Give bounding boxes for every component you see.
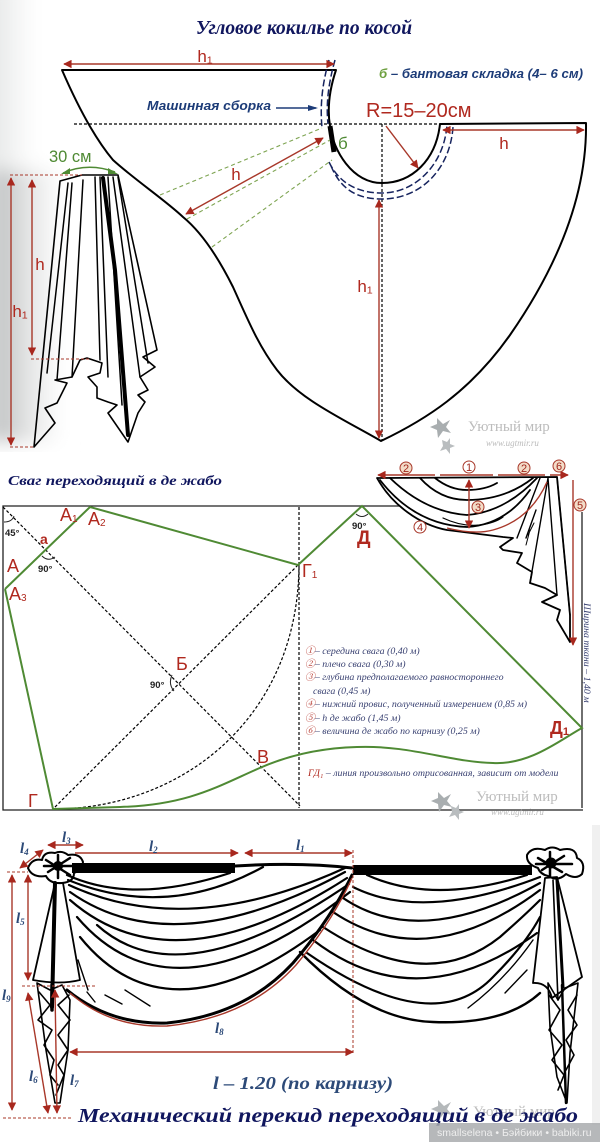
watermark: bottom <box>431 1100 555 1120</box>
label: machine gathering: Машинная сборка <box>147 99 271 113</box>
watermark: top: Уютный мир <box>468 419 550 435</box>
point labels: 2 <box>100 518 106 529</box>
radius arrow <box>386 126 418 168</box>
point labels: А <box>60 505 72 525</box>
left rosette <box>28 852 83 883</box>
circled numbers <box>400 460 586 534</box>
length labels: l <box>215 1021 219 1037</box>
circled numbers: 6 <box>556 461 562 473</box>
watermark: middle: www.ugtmir.ru <box>491 807 544 817</box>
length labels: l <box>16 911 20 927</box>
red height arrows <box>10 175 90 447</box>
point labels: Д <box>550 718 563 738</box>
label: 30 cm: 30 см <box>49 148 92 166</box>
watermark: top: www.ugtmir.ru <box>486 438 539 448</box>
seam allowance dashes <box>321 60 453 199</box>
left swag folds <box>67 867 350 989</box>
label: h: h <box>35 255 45 274</box>
length labels: 4 <box>23 847 29 857</box>
legend notes: ②– плечо свага (0,30 м) <box>305 658 406 670</box>
legend notes: ГД₁ – линия произвольно отрисованная, зависит от модели <box>307 768 558 779</box>
curtain rod <box>72 868 532 870</box>
panel: mechanical swag drawing <box>2 830 583 1118</box>
red measurement arrows <box>378 475 573 645</box>
point labels: Г <box>302 561 312 581</box>
swag folds <box>380 478 537 527</box>
vertical fabric width label: Ширина ткани – 1,40 м <box>581 602 592 703</box>
legend notes: ④– нижний провис, полученный измерением (0,85 м) <box>305 698 527 710</box>
angle labels: 90° <box>150 680 165 691</box>
length labels: l <box>62 830 66 846</box>
angle labels <box>5 521 367 691</box>
length labels: l <box>2 988 6 1004</box>
circled numbers: 3 <box>475 502 481 514</box>
point labels: 1 <box>312 570 318 581</box>
angle labels: 45° <box>5 528 20 539</box>
outer frame <box>3 506 583 810</box>
inner fold lines <box>47 177 148 405</box>
circled numbers: 1 <box>466 462 472 474</box>
site credit strip <box>429 1123 600 1142</box>
dashed reference lines <box>74 124 440 441</box>
length labels: 3 <box>65 836 71 846</box>
panel: corner jabot pattern <box>62 47 586 441</box>
right rosette <box>527 848 583 879</box>
length labels: l <box>296 838 300 854</box>
label: radius: R=15–20см <box>366 100 472 122</box>
label and arrow: h right: h <box>499 134 509 153</box>
circled numbers: 5 <box>577 500 583 512</box>
label: б: б <box>338 134 348 153</box>
legend notes: ⑥– величина де жабо по карнизу (0,25 м) <box>305 725 480 737</box>
red dimension lines <box>3 845 353 1118</box>
point labels: а <box>40 531 48 547</box>
length labels: 9 <box>6 994 11 1004</box>
bow pleat segment <box>330 126 334 152</box>
watermark: bottom: Уютный мир <box>473 1104 555 1120</box>
label and arrow: h diagonal: h <box>231 165 241 184</box>
panel: hanging jabot drawing <box>10 148 157 447</box>
legend notes <box>305 645 558 779</box>
label and arrow: h diagonal <box>186 138 323 214</box>
center gather <box>235 864 352 868</box>
watermark: middle: Уютный мир <box>476 789 558 805</box>
label: bow pleat legend: б – бантовая складка (4– 6 см) <box>379 67 583 81</box>
length labels: 1 <box>300 844 305 854</box>
legend notes: ③– глубина предполагаемого равностороннего <box>305 671 504 683</box>
length labels: 8 <box>219 1027 224 1037</box>
length labels: 7 <box>74 1079 79 1089</box>
point labels: Д <box>357 528 371 549</box>
legend notes: ⑤– h де жабо (1,45 м) <box>305 712 401 724</box>
jabot folds <box>517 477 570 615</box>
green dashed guides <box>160 128 332 247</box>
circled numbers: 2 <box>403 463 409 475</box>
label: machine gathering <box>147 99 318 113</box>
pattern outline <box>62 70 586 441</box>
length labels: 2 <box>152 845 158 855</box>
point labels: А <box>9 584 21 604</box>
label: total length: l – 1.20 (по карнизу) <box>213 1073 393 1094</box>
green pattern lines <box>5 506 582 809</box>
left jabot <box>33 883 80 982</box>
panel: swag drawing with jabot <box>377 460 586 645</box>
heading: mechanical swag: Механический перекид переходящий в де жабо <box>77 1105 578 1127</box>
length labels: 5 <box>20 917 25 927</box>
jabot outline with frills <box>34 175 157 447</box>
length labels: l <box>20 841 24 857</box>
legend notes: свага (0,45 м) <box>313 686 370 697</box>
angle labels: 90° <box>352 521 367 532</box>
circled numbers: 2 <box>521 463 527 475</box>
site credit strip: smallselena • Бэйбики • babiki.ru <box>437 1127 592 1139</box>
length labels <box>2 830 305 1089</box>
point labels <box>7 505 569 811</box>
right jabot <box>533 877 582 998</box>
label: h1: h₁ <box>12 302 28 321</box>
watermark: top <box>430 418 550 454</box>
right jabot ruffles <box>548 983 578 1103</box>
circled numbers: 4 <box>417 522 423 534</box>
label and arrow: h1 vertical: h₁ <box>357 277 373 296</box>
label: h1 top: h₁ <box>197 47 213 66</box>
watermark: middle <box>431 789 558 820</box>
length labels: 6 <box>33 1075 38 1085</box>
point labels: А <box>7 556 19 576</box>
title: corner jabot: Угловое кокилье по косой <box>196 18 412 39</box>
point labels: Г <box>28 791 38 811</box>
label: 30 cm <box>49 148 118 174</box>
point labels: В <box>257 747 269 767</box>
angle arcs <box>4 514 368 691</box>
length labels: l <box>29 1069 33 1085</box>
point labels: 3 <box>21 593 27 604</box>
point labels: Б <box>176 654 188 674</box>
swag fill and outline <box>377 477 570 642</box>
point labels: А <box>88 509 100 529</box>
length labels: l <box>70 1073 74 1089</box>
left jabot ruffles <box>37 983 70 1103</box>
dotted construction lines <box>3 507 300 809</box>
angle labels: 90° <box>38 564 53 575</box>
point labels: 1 <box>563 726 569 738</box>
right swag folds <box>307 875 540 1003</box>
point labels: 1 <box>72 514 78 525</box>
panel: swag pattern <box>3 505 592 811</box>
heading: swag: Сваг переходящий в де жабо <box>8 474 222 489</box>
length labels: l <box>149 839 153 855</box>
legend notes: ①– середина свага (0,40 м) <box>305 645 420 657</box>
